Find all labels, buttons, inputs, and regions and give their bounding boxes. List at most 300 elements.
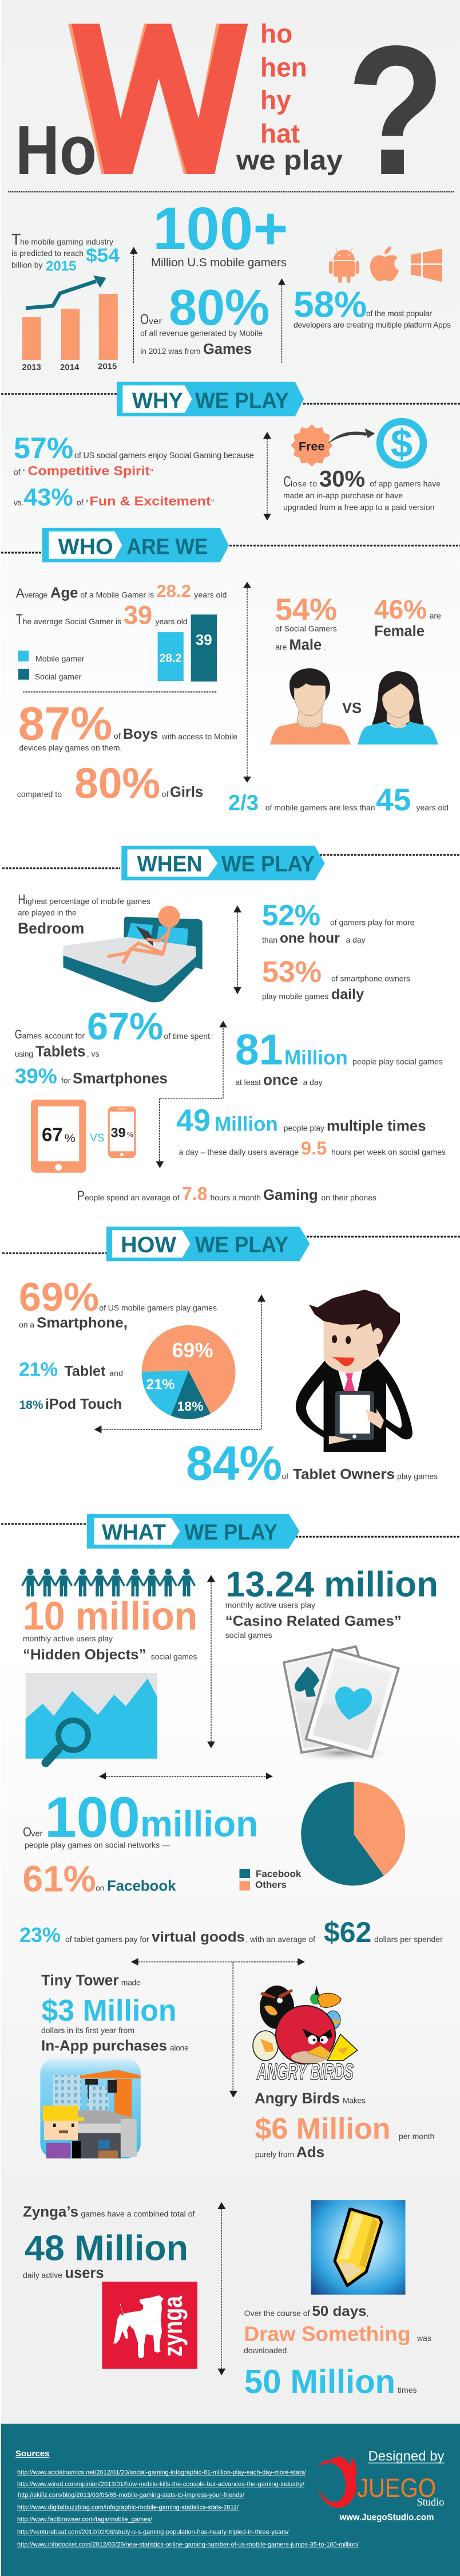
bar chart: 2013-2015 with arrow: 2014	[60, 363, 80, 372]
sources list: http://skillz.com/blog/2013/03/05/65-mobile-gaming-stats-to-impress-your-friends/	[18, 2492, 245, 2499]
stat: draw something 50 million: 50 days	[312, 2303, 366, 2319]
title word: Ho: Ho	[15, 111, 97, 189]
stat: 13.24 million casino: monthly active users play	[225, 1601, 315, 1610]
stat: 54% male: .	[324, 642, 326, 651]
stat: 13.24 million casino: social games	[225, 1630, 272, 1640]
stat: 54% male	[275, 593, 337, 653]
stat: 7.8 hours	[77, 1184, 376, 1204]
icon: tablet 67%: %	[64, 1133, 76, 1145]
bar chart: 2013-2015 with arrow: 2015	[98, 362, 117, 372]
icon: dollar coin: $	[391, 422, 413, 466]
word list: ho	[260, 19, 292, 49]
stat: 43% fun and excitement: ”	[211, 499, 214, 508]
stat: 43% fun and excitement: of “	[77, 499, 89, 508]
icon: female figure	[358, 671, 438, 745]
stat: 80% girls: compared to	[17, 790, 62, 799]
stat: 30% in-app purchase: made an in-app purchase or have	[283, 491, 403, 500]
sources list: http://www.infodocket.com/2012/03/29/new-statistics-online-gaming-number-of-us-mobile-gamers-jumps-35-to-100-million/	[17, 2542, 359, 2549]
section banner: what we play	[1, 1514, 460, 1549]
sources list: Sources	[15, 2449, 49, 2459]
icon: draw something app	[311, 2200, 405, 2295]
stat: 53% daily: of smartphone owners	[331, 974, 410, 983]
stat: 52% one hour	[262, 899, 415, 946]
legend: Social gamer	[35, 672, 82, 682]
stat: draw something 50 million: ,	[366, 2309, 368, 2318]
icon: phone 39%: 39	[111, 1125, 126, 1140]
text: $54 billion prediction: he mobile gaming industry	[20, 237, 113, 246]
stat: 30% in-app purchase: lose to	[291, 479, 317, 488]
stat: draw something 50 million: Draw Something	[244, 2322, 411, 2345]
legend: Facebook	[256, 1869, 302, 1880]
stat: 52% one hour: one hour	[280, 931, 340, 946]
stat: angry birds $6 million: Ads	[296, 2144, 324, 2161]
stat: 2/3 less than 45: of mobile gamers are less than	[265, 803, 375, 812]
website url: www.JuegoStudio.com	[339, 2513, 434, 2523]
stat: 81 million: at least	[235, 1077, 261, 1086]
stat: 10 million hidden objects: “Hidden Objects”	[23, 1647, 146, 1663]
stat: average age: T	[16, 612, 23, 628]
stat: 49 million multiple times: 9.5	[301, 1137, 327, 1159]
logo: zynga: zynga	[158, 2296, 188, 2357]
stat: 69% smartphone: of US mobile gamers play games	[99, 1303, 217, 1312]
stat: 30% in-app purchase: of app gamers have	[370, 479, 441, 488]
stat: average age: 39	[124, 600, 152, 629]
logo: juego studio: Studio	[417, 2496, 444, 2508]
stat: 80% girls	[17, 759, 203, 807]
stat: 10 million hidden objects	[23, 1594, 197, 1663]
stat: 81 million: once	[263, 1072, 298, 1088]
stat: 21% tablet	[19, 1359, 123, 1381]
illustration: businessman with tablet	[296, 1290, 413, 1452]
stat: average age: years old	[194, 590, 227, 599]
section banner: how we play	[2, 1227, 460, 1261]
label: vs: VS	[342, 700, 362, 716]
stat: 80% of revenue: 80%	[169, 279, 269, 336]
stat: 81 million: people play social games	[352, 1057, 443, 1066]
stat: 80% of revenue	[140, 279, 269, 357]
stat: 58% multi-platform developers	[294, 284, 451, 329]
stat: 30% in-app purchase: C	[284, 472, 291, 490]
icon: tiny tower app	[40, 2058, 141, 2159]
stat: 2/3 less than 45	[228, 782, 449, 817]
stat: draw something 50 million: was	[417, 2333, 431, 2342]
we play: we play	[236, 145, 343, 176]
word list	[260, 19, 307, 148]
text: bedroom: are played in the	[18, 908, 77, 917]
stat: tiny tower $3 million: dollars in its first year from	[41, 2026, 134, 2035]
stat: 81 million	[235, 1025, 443, 1088]
stat: angry birds $6 million: $6 Million	[255, 2112, 390, 2145]
stat: 10 million hidden objects: monthly active users play	[23, 1634, 113, 1643]
stat: 49 million multiple times: a day – these daily users average	[179, 1148, 299, 1157]
icon: angry birds logo	[253, 1986, 358, 2085]
stat: 81 million: a day	[303, 1077, 323, 1086]
text: $54 billion prediction: 2015	[46, 259, 76, 274]
stat: average age: he average Social Gamer is	[23, 617, 121, 626]
section banner: what we play: WE PLAY	[184, 1520, 277, 1545]
stat: 80% girls: 80%	[74, 759, 160, 807]
word list: hat	[260, 119, 300, 148]
stat: 54% male: 54%	[275, 593, 337, 627]
stat: tiny tower $3 million: Tiny Tower	[41, 1973, 119, 1989]
stat: 21% tablet: and	[109, 1369, 123, 1378]
stat: draw something 50 million: Over the course of	[244, 2309, 310, 2318]
text: bedroom: ighest percentage of mobile games	[26, 896, 150, 905]
icon: tablet 67%: 67	[42, 1124, 63, 1145]
stat: over 100 million: 100	[45, 1785, 140, 1849]
stat: 87% boys: 87%	[18, 698, 112, 750]
stat: 53% daily: 53%	[262, 955, 322, 988]
stat: 23% virtual goods $62: , with an average of	[245, 1935, 315, 1944]
stat: 67% tablets vs 39% smartphones: Tablets	[35, 1043, 85, 1059]
stat: 13.24 million casino: “Casino Related Games”	[225, 1613, 402, 1629]
icon: android	[329, 248, 359, 283]
stat: 80% girls: Girls	[170, 785, 203, 801]
stat: 7.8 hours: P	[77, 1188, 85, 1204]
icon: phone 39%	[108, 1106, 136, 1158]
stat: 53% daily: play mobile games	[262, 991, 328, 1001]
sources list: http://www.wired.com/opinion/2013/01/how-mobile-kills-the-console-but-advances-the-gaming-industry/	[17, 2481, 305, 2488]
text: bedroom	[18, 892, 150, 937]
stat: 52% one hour: 52%	[262, 899, 320, 932]
stat: 61% on facebook: 61%	[23, 1858, 96, 1899]
stat: over 100 million: people play games on social networks —	[25, 1841, 170, 1850]
stat: angry birds $6 million: purely from	[255, 2150, 294, 2159]
illustration: magnifier over graph	[26, 1673, 157, 1763]
panel: how we play statistics	[19, 1274, 438, 1490]
stat: 53% daily	[262, 955, 410, 1002]
stat: 67% tablets vs 39% smartphones: 39%	[15, 1065, 57, 1088]
stat: 57% competitive spirit: of US social gamers enjoy Social Gaming because	[74, 451, 254, 460]
stat: 67% tablets vs 39% smartphones: , vs	[87, 1049, 99, 1058]
stat: draw something 50 million: times	[398, 2385, 417, 2394]
stat: 52% one hour: than	[262, 935, 277, 944]
bar chart: 2013-2015 with arrow: 2013	[22, 363, 41, 372]
label: vs: VS	[90, 1132, 104, 1144]
section banner: why we play	[1, 382, 460, 416]
stat: 67% tablets vs 39% smartphones: G	[15, 1027, 22, 1041]
stat: 46% female: Female	[374, 624, 425, 640]
stat: 2/3 less than 45: years old	[417, 803, 449, 812]
stat: 54% male: of Social Gamers	[275, 624, 337, 633]
stat: 43% fun and excitement: vs.	[14, 499, 23, 508]
panel: what we play statistics	[19, 1565, 443, 2400]
stat: 23% virtual goods $62: 23%	[19, 1923, 61, 1947]
stat: zynga 48 million: Zynga’s	[23, 2203, 78, 2220]
pie chart: devices: 18%	[177, 1399, 204, 1413]
stat: 57% competitive spirit: 57%	[14, 432, 73, 465]
stat: 58% multi-platform developers: developers are creating multiple platform Apps	[294, 320, 451, 329]
panel: why we play statistics	[14, 422, 441, 521]
legend: Mobile gamer	[35, 654, 85, 663]
stat: 43% fun and excitement	[14, 484, 214, 511]
stat: tiny tower $3 million: $3 Million	[41, 1994, 176, 2027]
bar chart: age: 28.2	[159, 652, 182, 665]
icon: dollar coin	[380, 422, 423, 466]
stat: 61% on facebook	[23, 1858, 176, 1899]
stat: zynga 48 million: users	[65, 2266, 104, 2282]
stat: 21% tablet: Tablet	[64, 1364, 106, 1380]
stat: 2/3 less than 45: 45	[376, 782, 411, 817]
connector arrow	[131, 1958, 305, 2098]
stat: 80% of revenue: of all revenue generated by Mobile	[140, 329, 263, 338]
stat: 7.8 hours: hours a month	[211, 1193, 261, 1202]
stat: angry birds $6 million: Angry Birds	[255, 2090, 340, 2106]
pie chart: devices	[142, 1325, 236, 1419]
connector arrow	[94, 1294, 265, 1433]
stat: 61% on facebook: on	[96, 1884, 104, 1893]
text: $54 billion prediction: T	[11, 231, 21, 248]
bar chart: 2013-2015 with arrow	[22, 275, 118, 372]
stat: 100+ million gamers: 100+	[153, 195, 288, 262]
stat: 67% tablets vs 39% smartphones: 67%	[87, 1006, 163, 1048]
stat: tiny tower $3 million: alone	[170, 2043, 189, 2053]
stat: 80% girls: of	[162, 790, 169, 799]
sources list	[15, 2449, 359, 2549]
bar chart: age: 39	[196, 631, 212, 648]
stat: tiny tower $3 million: In-App purchases	[41, 2037, 167, 2054]
arrow: free to paid	[328, 428, 375, 444]
stat: 46% female	[374, 594, 441, 640]
text: bedroom: H	[18, 892, 25, 907]
section banner: who are we: ARE WE	[127, 534, 208, 559]
stat: average age	[16, 581, 227, 629]
icon: windows	[411, 249, 442, 282]
stat: 46% female: 46%	[374, 594, 427, 624]
stat: angry birds $6 million: per month	[399, 2132, 434, 2141]
stat: average age: of a Mobile Gamer is	[80, 590, 154, 599]
stat: zynga 48 million	[23, 2203, 195, 2282]
stat: 87% boys: with access to Mobile	[161, 732, 237, 741]
designed by heading: Designed by	[368, 2449, 444, 2464]
section banner: how we play: WE PLAY	[195, 1233, 288, 1258]
word list: hen	[260, 53, 307, 82]
stat: 67% tablets vs 39% smartphones: of time spent	[164, 1031, 210, 1041]
stat: over 100 million: ver	[31, 1829, 42, 1839]
stat: 13.24 million casino: 13.24 million	[225, 1565, 438, 1605]
icon: tablet 67%	[31, 1100, 86, 1173]
arrow	[130, 247, 138, 363]
stat: 69% smartphone	[19, 1274, 217, 1331]
stat: 18% iPod touch: iPod Touch	[45, 1396, 122, 1412]
arrow	[243, 582, 251, 783]
icon: free badge: Free	[299, 440, 324, 454]
stat: 67% tablets vs 39% smartphones: Smartphones	[73, 1071, 168, 1087]
section banner: why we play: WHY	[132, 389, 183, 413]
stat: 49 million multiple times: hours per week on social games	[331, 1148, 446, 1157]
stat: 21% tablet: 21%	[19, 1359, 58, 1381]
title: How W(ho, hen, hy, hat) we play?	[15, 8, 445, 214]
pie chart: social networks	[301, 1782, 405, 1885]
arrow	[233, 905, 241, 994]
icon: phone 39%: %	[127, 1131, 133, 1139]
stat: 53% daily: daily	[331, 986, 364, 1002]
stat: 49 million multiple times: Million	[215, 1113, 278, 1135]
panel: who are we statistics	[16, 581, 449, 817]
stat: 67% tablets vs 39% smartphones	[15, 1006, 210, 1088]
stat: 49 million multiple times: people play	[284, 1123, 324, 1132]
arrow	[217, 2202, 225, 2376]
sources list: http://www.digitalbuzzblog.com/infographic-mobile-gaming-statistics-stats-2011/	[17, 2504, 239, 2511]
stat: 49 million multiple times	[176, 1103, 446, 1159]
stat: 30% in-app purchase: upgraded from a free app to a paid version	[283, 503, 434, 512]
stat: 80% of revenue: in 2012 was from	[140, 346, 201, 356]
arrow	[99, 1773, 273, 1779]
stat: zynga 48 million: daily active	[23, 2271, 62, 2280]
stat: 84% tablet owners: of	[281, 1472, 288, 1481]
stat: average age: 28.2	[157, 581, 191, 601]
stat: 30% in-app purchase	[283, 466, 441, 512]
footer panel	[1, 2424, 460, 2576]
stat: 80% of revenue: ver	[149, 317, 162, 326]
arrow	[278, 278, 285, 363]
stat: 23% virtual goods $62: $62	[324, 1916, 371, 1948]
stat: 69% smartphone: on a	[19, 1320, 34, 1329]
panel: when we play statistics	[15, 892, 446, 1204]
icon: apple	[370, 246, 399, 281]
section banner: when we play: WE PLAY	[221, 852, 315, 877]
stat: 23% virtual goods $62	[19, 1916, 443, 1948]
stat: 18% iPod touch: 18%	[19, 1399, 43, 1412]
stat: 46% female: are	[430, 611, 441, 620]
stat: draw something 50 million: 50 Million	[244, 2363, 395, 2400]
stat: 23% virtual goods $62: virtual goods	[152, 1929, 245, 1945]
stat: 84% tablet owners: play games	[397, 1472, 438, 1481]
stat: 69% smartphone: Smartphone,	[37, 1315, 128, 1331]
stat: over 100 million: O	[23, 1825, 31, 1840]
big letter W drawn shape with shadow	[68, 24, 248, 174]
stat: average age: A	[16, 585, 25, 600]
stat: 43% fun and excitement: Fun & Excitement	[89, 494, 211, 509]
stat: 7.8 hours: Gaming	[263, 1187, 318, 1203]
stat: draw something 50 million: downloaded	[244, 2346, 287, 2355]
icon: playing cards	[284, 1647, 399, 1762]
pie chart: devices: 21%	[146, 1377, 175, 1393]
stat: 57% competitive spirit: “	[23, 468, 26, 477]
stat: 87% boys: devices play games on them,	[19, 743, 122, 753]
stat: average age: years old	[156, 617, 188, 626]
stat: 67% tablets vs 39% smartphones: for	[61, 1076, 71, 1085]
legend	[18, 651, 85, 682]
stat: 80% of revenue: Games	[203, 341, 252, 357]
stat: angry birds $6 million: Makes	[343, 2096, 366, 2105]
arrow	[263, 432, 271, 521]
stat: 57% competitive spirit: ”	[150, 468, 153, 477]
stat: 54% male: Male	[290, 637, 322, 653]
section banner: who are we: WHO	[58, 534, 113, 559]
stat: 10 million hidden objects: social games	[151, 1652, 197, 1661]
logo: zynga	[102, 2282, 197, 2369]
stat: 49 million multiple times: 49	[176, 1103, 211, 1137]
sources list: http://www.socialnomics.net/2012/01/20/social-gaming-infographic-81-million-play-each-day-more-stats/	[17, 2469, 307, 2476]
illustration: person on bed	[63, 906, 203, 1002]
text: $54 billion prediction: billion by	[11, 261, 42, 270]
stat: 23% virtual goods $62: of tablet gamers pay for	[65, 1935, 149, 1944]
stat: 84% tablet owners: 84%	[186, 1436, 282, 1490]
icon: row of people	[22, 1569, 195, 1597]
sources list: http://venturebeat.com/2012/02/08/study-u-s-gaming-population-has-nearly-tripled-in-three-years/	[17, 2529, 289, 2536]
stat: 61% on facebook: Facebook	[107, 1878, 176, 1894]
text: $54 billion prediction: is predicted to reach	[11, 249, 84, 258]
section banner: who are we	[1, 528, 460, 562]
section banner: why we play: WE PLAY	[195, 389, 289, 413]
stat: 7.8 hours: 7.8	[182, 1184, 207, 1204]
bar chart: age	[158, 615, 217, 682]
stat: 49 million multiple times: multiple times	[327, 1118, 426, 1134]
stat: 57% competitive spirit	[14, 432, 254, 478]
stat: 100+ million gamers: Million U.S mobile gamers	[151, 256, 287, 269]
sources list: http://www.factbrowser.com/tags/mobile_games/	[17, 2516, 153, 2523]
stat: average age: Age	[50, 585, 78, 601]
stat: 54% male: are	[275, 642, 287, 651]
stat: 87% boys	[18, 698, 237, 753]
arrow	[207, 1575, 215, 1748]
stat: tiny tower $3 million	[41, 1973, 189, 2054]
stat: 67% tablets vs 39% smartphones: ames account for	[22, 1031, 85, 1040]
stat: 81 million: Million	[284, 1046, 348, 1069]
section banner: when we play	[2, 846, 460, 880]
stat: average age: verage	[25, 590, 47, 599]
connector arrow	[156, 1021, 227, 1168]
stat: 52% one hour: a day	[346, 935, 366, 944]
section banner: what we play: WHAT	[102, 1520, 166, 1545]
stat: 80% of revenue: O	[140, 312, 149, 328]
logo: juego studio	[318, 2457, 444, 2508]
stat: angry birds $6 million	[255, 2090, 434, 2161]
pie chart: devices: 69%	[172, 1338, 213, 1362]
question mark: ?	[347, 8, 445, 214]
stat: 81 million: 81	[235, 1025, 283, 1073]
stat: over 100 million: million	[140, 1803, 258, 1845]
text: $54 billion prediction: $54	[86, 245, 120, 266]
stat: 57% competitive spirit: Competitive Spirit	[27, 463, 150, 478]
stat: 58% multi-platform developers: of the most popular	[366, 309, 432, 318]
stat: zynga 48 million: 48 Million	[25, 2229, 188, 2268]
stat: over 100 million	[23, 1785, 258, 1850]
stat: 84% tablet owners	[186, 1436, 438, 1490]
stat: 67% tablets vs 39% smartphones: using	[15, 1049, 33, 1058]
legend: Others	[255, 1880, 287, 1890]
stat: zynga 48 million: games have a combined total of	[81, 2209, 195, 2219]
icon: free badge	[291, 425, 332, 466]
stat: draw something 50 million	[244, 2303, 431, 2400]
section banner: when we play: WHEN	[137, 852, 203, 877]
icon: male figure	[270, 668, 351, 745]
text: bedroom: Bedroom	[18, 920, 84, 937]
stat: 2/3 less than 45: 2/3	[228, 791, 259, 815]
icon: angry birds logo: ANGRY BIRDS	[256, 2059, 354, 2085]
section banner: how we play: HOW	[121, 1233, 176, 1258]
stat: 57% competitive spirit: of	[14, 468, 21, 477]
panel: market size	[11, 195, 451, 372]
stat: 10 million hidden objects: 10 million	[23, 1594, 197, 1638]
text: $54 billion prediction	[11, 231, 120, 274]
stat: 84% tablet owners: Tablet Owners	[293, 1467, 395, 1483]
logo: juego studio: JUEGO	[357, 2473, 436, 2503]
legend	[239, 1869, 302, 1890]
stat: 52% one hour: of gamers play for more	[330, 918, 415, 927]
stat: tiny tower $3 million: made	[121, 1978, 141, 1987]
stat: 13.24 million casino	[225, 1565, 438, 1640]
word list: hy	[260, 85, 291, 115]
stat: 87% boys: of	[114, 731, 121, 740]
stat: 7.8 hours: on their phones	[321, 1193, 376, 1202]
stat: 43% fun and excitement: 43%	[24, 484, 73, 511]
stat: 87% boys: Boys	[123, 726, 158, 742]
stat: 7.8 hours: eople spend an average of	[85, 1193, 180, 1202]
stat: 69% smartphone: 69%	[19, 1274, 99, 1319]
stat: 30% in-app purchase: 30%	[319, 466, 365, 491]
